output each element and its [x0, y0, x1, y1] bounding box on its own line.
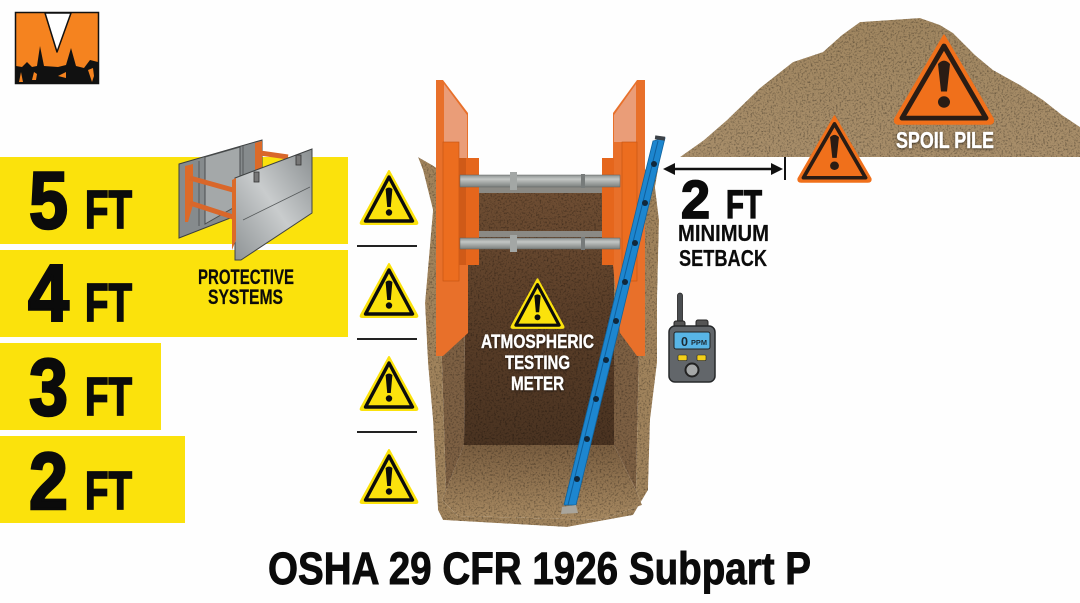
icon: warning 1	[361, 171, 417, 224]
depth bar: 5 FT: 5	[29, 156, 68, 246]
icon: large orange warning	[895, 35, 993, 124]
label: protective systems	[198, 266, 294, 309]
label: 2 ft minimum setback: MINIMUM	[678, 220, 769, 246]
label: 2 ft minimum setback: FT	[726, 183, 762, 227]
left shield	[436, 80, 479, 356]
depth bar: 2 FT: FT	[85, 461, 132, 521]
steel struts	[460, 172, 620, 252]
warning icon column	[357, 171, 417, 503]
icon: yellow warning in trench	[511, 279, 564, 328]
depth bar: 4 FT: 4	[28, 249, 69, 339]
label: atmospheric testing meter: ATMOSPHERIC	[481, 332, 594, 353]
trench floor	[442, 445, 642, 520]
depth bar: 5 FT	[0, 156, 348, 246]
icon: warning 2	[361, 264, 417, 317]
depth bar: 3 FT	[0, 343, 161, 433]
blue ladder	[561, 135, 665, 514]
label: 2 ft minimum setback	[678, 170, 769, 271]
depth bar: 3 FT: FT	[85, 367, 132, 427]
label: atmospheric testing meter: METER	[511, 374, 564, 395]
icon: protective trench box	[179, 140, 312, 260]
logo: M badge	[16, 12, 98, 84]
icon: warning 4	[361, 450, 417, 503]
trench soil walls	[418, 157, 660, 527]
trench excavation	[418, 157, 660, 527]
depth bar: 2 FT	[0, 436, 185, 527]
depth bar: 2 FT: 2	[29, 437, 68, 527]
depth bar: 4 FT	[0, 249, 348, 339]
spoil pile	[680, 18, 1080, 157]
icon: atmospheric meter: PPM	[691, 340, 707, 347]
trench inner side walls	[440, 300, 640, 490]
depth bar: 5 FT: FT	[85, 180, 132, 240]
right shield	[602, 80, 645, 356]
icon: small orange warning	[798, 116, 871, 182]
label: atmospheric testing meter	[481, 332, 594, 395]
depth bar: 4 FT: FT	[85, 273, 132, 333]
label: 2 ft minimum setback: 2	[681, 170, 710, 230]
icon: atmospheric meter: 0	[681, 334, 688, 349]
icon: warning 3	[361, 357, 417, 410]
setback arrow	[663, 157, 785, 180]
label: protective systems: PROTECTIVE	[198, 266, 294, 289]
label: spoil pile: SPOIL PILE	[896, 127, 994, 153]
trench back wall	[464, 190, 614, 445]
title: OSHA 29 CFR 1926 Subpart P	[268, 543, 811, 594]
label: atmospheric testing meter: TESTING	[505, 353, 570, 374]
icon: atmospheric meter	[669, 293, 715, 382]
depth bar: 3 FT: 3	[29, 343, 68, 433]
label: 2 ft minimum setback: SETBACK	[679, 245, 767, 271]
label: protective systems: SYSTEMS	[208, 286, 283, 309]
